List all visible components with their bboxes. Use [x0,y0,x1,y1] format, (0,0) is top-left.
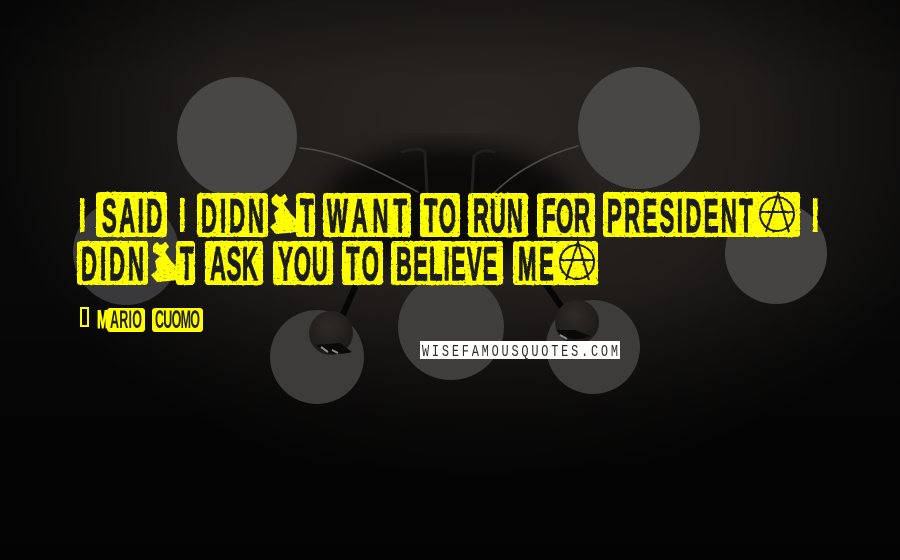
quote line 1 [80,190,818,242]
quote line 2: BELIEVE [396,238,498,290]
quote line 1: WANT [327,190,407,242]
quote line 1: PRESIDENT [607,190,753,242]
icon: anarchy symbol full stop [560,242,594,280]
attribution: Mario Cuomo: CUOMO [155,306,200,334]
quote line 2: DIDN [81,238,144,290]
quote line 1: RUN [473,190,523,242]
quote line 1: TO [424,190,456,242]
quote line 2: YOU [278,238,328,290]
quote line 2: TO [346,238,379,290]
lamp: glowing globes [73,67,827,404]
attribution: Mario Cuomo: ARIO [110,306,142,334]
quote line 1: SAID [102,190,162,242]
attribution: Mario Cuomo: M [97,307,108,334]
quote line 1: FOR [542,190,590,242]
lamp: small dark spheres in lower globes [309,300,599,355]
quote text [77,190,818,290]
quote line 1: DIDN [201,190,264,242]
lamp: central fixture and arms [300,146,578,330]
quote line 1: T [300,190,314,242]
quote line 2 [77,238,598,290]
quote line 2: ME [518,238,554,290]
quote line 2: T [180,238,194,290]
quote line 2: ASK [210,238,258,290]
watermark: wisefamousquotes.com: WISEFAMOUSQUOTES.COM [422,343,618,362]
attribution: Mario Cuomo [81,306,203,334]
icon: anarchy symbol full stop [760,194,794,232]
